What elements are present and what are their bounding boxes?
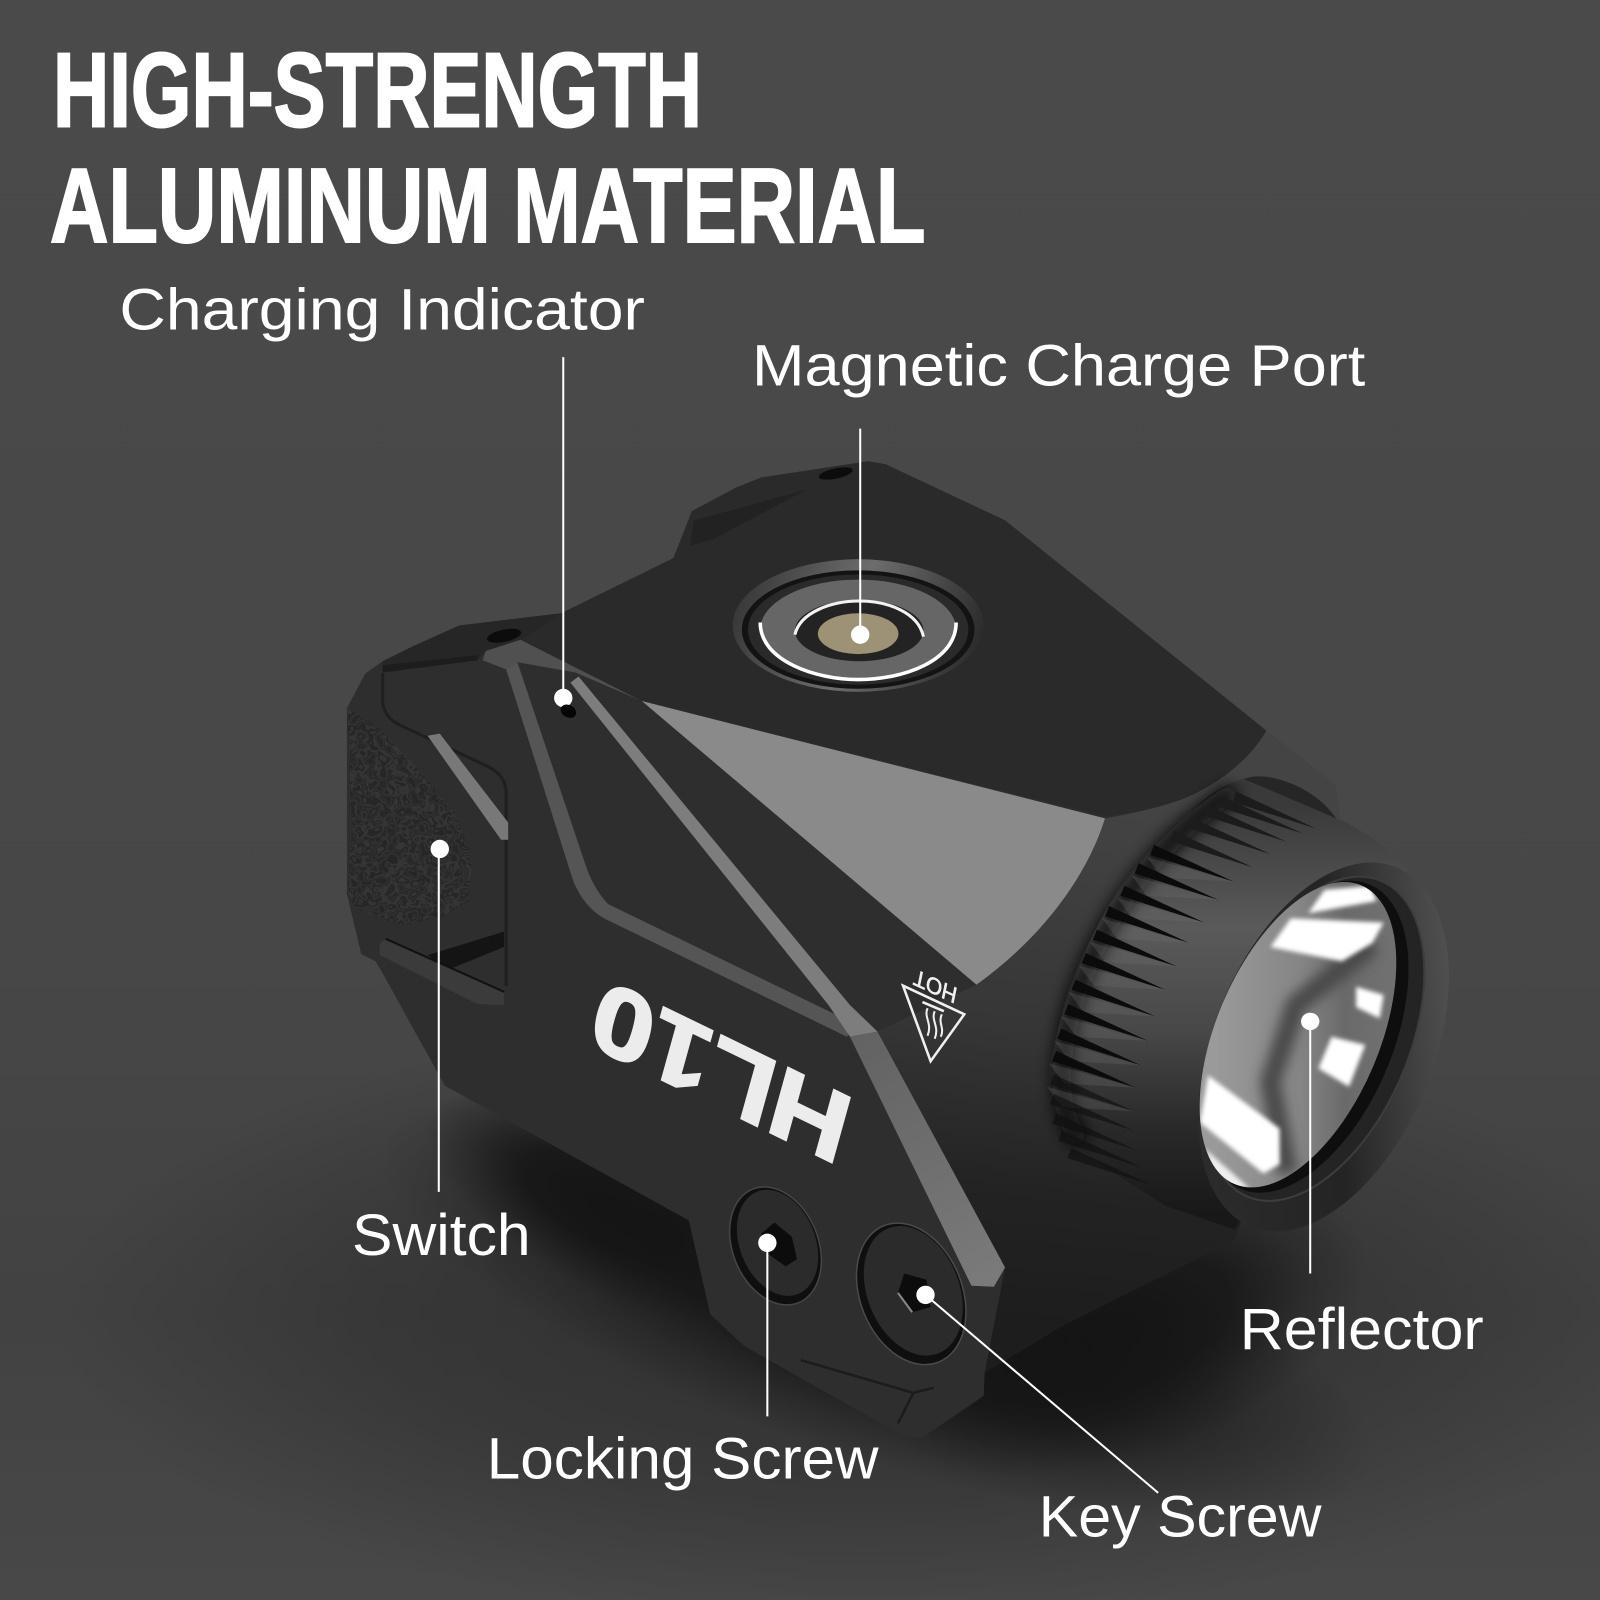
callout: locking screw: Locking Screw xyxy=(487,1427,880,1492)
HOT warning icon xyxy=(903,964,964,1061)
callout: switch xyxy=(352,840,531,1268)
grey facet xyxy=(642,701,1105,985)
locking screw xyxy=(713,1173,838,1319)
light strip upper xyxy=(570,677,878,1037)
magnetic charge port xyxy=(733,559,984,692)
lower rail details xyxy=(801,1360,934,1423)
callout: reflector: Reflector xyxy=(1240,1297,1484,1362)
top plate xyxy=(520,464,1266,816)
callout: magnetic charge port: Magnetic Charge Port xyxy=(752,334,1365,399)
small grey strip xyxy=(428,734,508,840)
reflector xyxy=(1200,882,1396,1188)
callout: locking screw xyxy=(487,1234,880,1492)
knurled ridges xyxy=(1047,792,1316,1185)
callout: key screw: Key Screw xyxy=(1039,1485,1322,1550)
grey strip at junction xyxy=(483,640,642,701)
switch window slot xyxy=(380,932,504,1005)
callout: magnetic charge port xyxy=(752,334,1365,644)
callout: switch: Switch xyxy=(352,1203,531,1268)
key screw xyxy=(836,1207,986,1381)
title xyxy=(50,32,926,265)
front bezel xyxy=(1149,826,1498,1268)
dark bevel strip xyxy=(506,662,856,1037)
barrel xyxy=(1050,779,1432,1230)
collar recess xyxy=(1185,776,1347,832)
title: HIGH-STRENGTH xyxy=(53,32,702,150)
product: HL10 weapon light xyxy=(347,461,1498,1439)
callout: reflector xyxy=(1240,1013,1484,1362)
callout: charging indicator xyxy=(119,278,645,721)
front rail bump xyxy=(383,613,561,672)
HOT warning icon: HOT xyxy=(911,964,959,1008)
light strip lower xyxy=(850,1032,1005,1287)
rear rail bump xyxy=(673,461,886,558)
callout: charging indicator: Charging Indicator xyxy=(119,278,645,343)
shoulder of head xyxy=(878,731,1372,1372)
body silhouette xyxy=(347,461,1372,1439)
callout: key screw xyxy=(916,1286,1322,1550)
textured switch xyxy=(347,708,472,924)
title: ALUMINUM MATERIAL xyxy=(50,147,926,265)
left side panel edge xyxy=(383,673,506,986)
HL10 logo: HL10 xyxy=(580,958,862,1186)
